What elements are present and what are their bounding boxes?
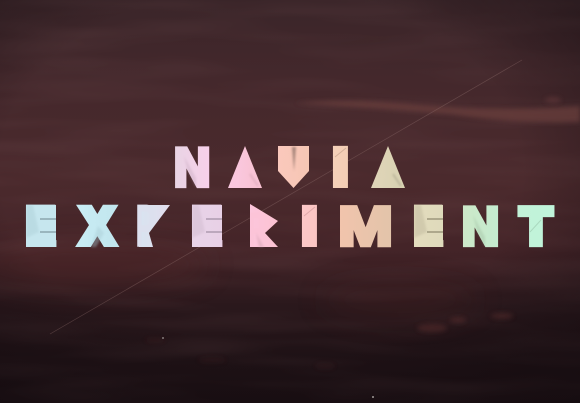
line one: NAVIA [174,134,405,202]
letter P: P [135,192,155,261]
letter A: A [234,142,256,199]
letter I: I [326,134,355,202]
line two: EXPERIMENT [22,192,552,261]
letter N: N [174,137,210,197]
letter E: E [22,193,59,261]
letter V: V [280,135,307,195]
stars [162,337,374,398]
letter A [371,142,405,199]
letter X: X [81,198,114,255]
letter I: I [295,193,324,261]
title: NAVIA EXPERIMENT [22,134,552,261]
cloud streak [295,97,580,122]
diagonal line [50,60,522,334]
distant clouds [145,313,513,369]
letter P [135,192,170,261]
letter A: A [377,142,399,199]
letter M: M [338,195,393,257]
letter T: T [520,198,552,256]
letter N: N [462,197,499,257]
letter E: E [410,193,445,261]
letter R: R [249,203,265,259]
letter R [249,203,278,259]
letter E: E [188,193,225,261]
letter A [228,142,262,199]
